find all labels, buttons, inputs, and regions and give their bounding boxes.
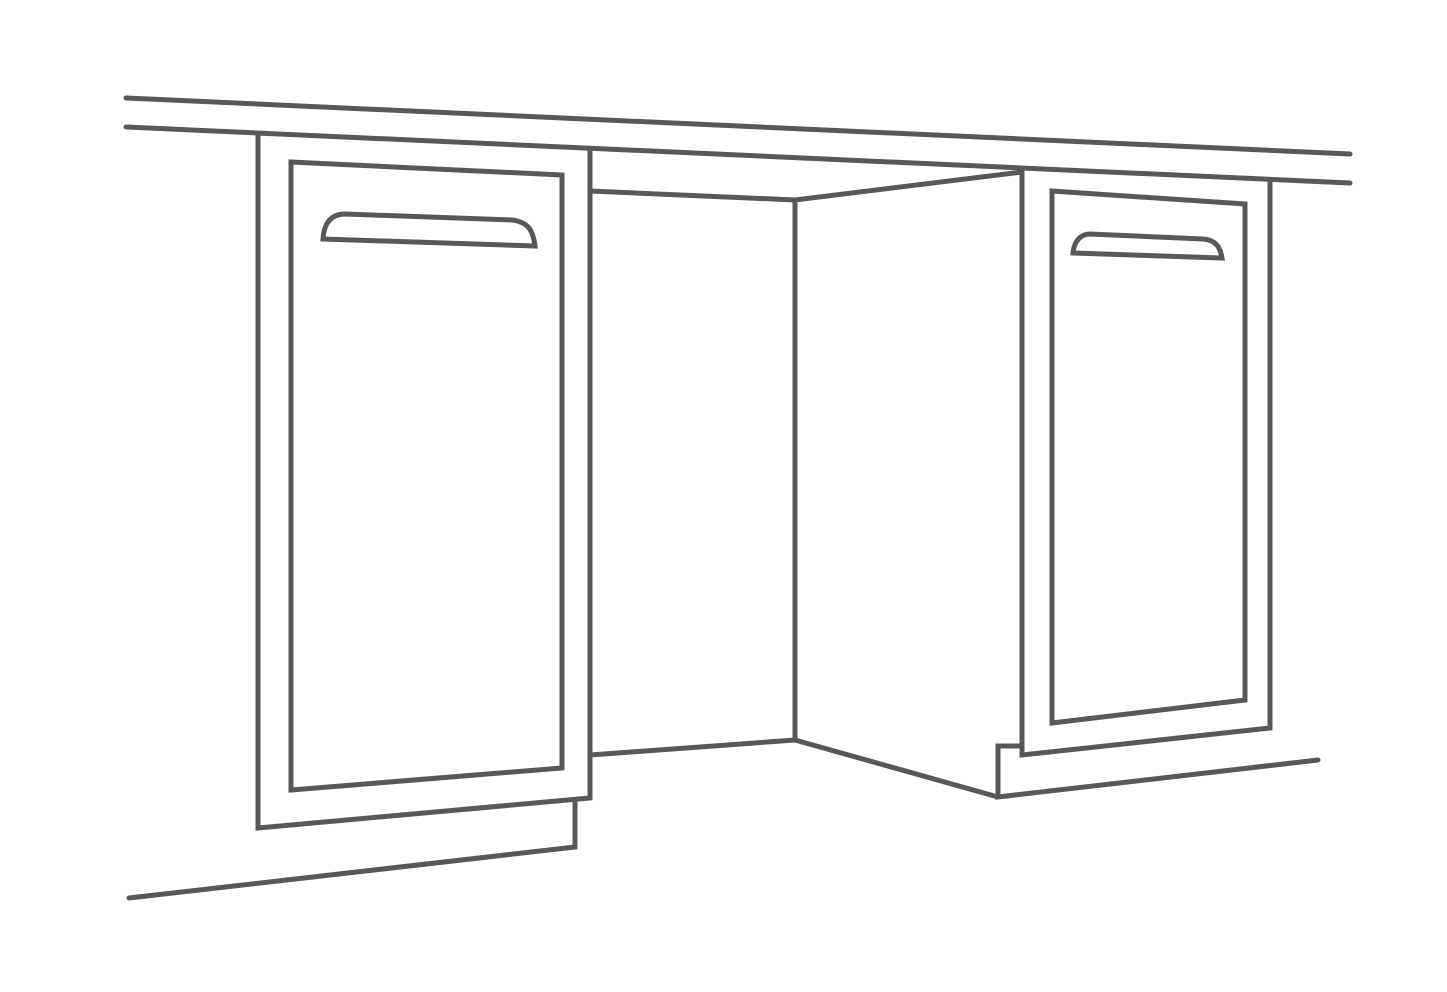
right cabinet — [998, 172, 1318, 797]
appliance opening — [590, 172, 1022, 797]
left handle — [323, 214, 535, 246]
countertop edges — [126, 98, 1350, 183]
left door panel — [291, 162, 562, 790]
left cabinet — [129, 135, 590, 898]
right door panel — [1052, 191, 1245, 723]
right handle — [1073, 234, 1222, 258]
